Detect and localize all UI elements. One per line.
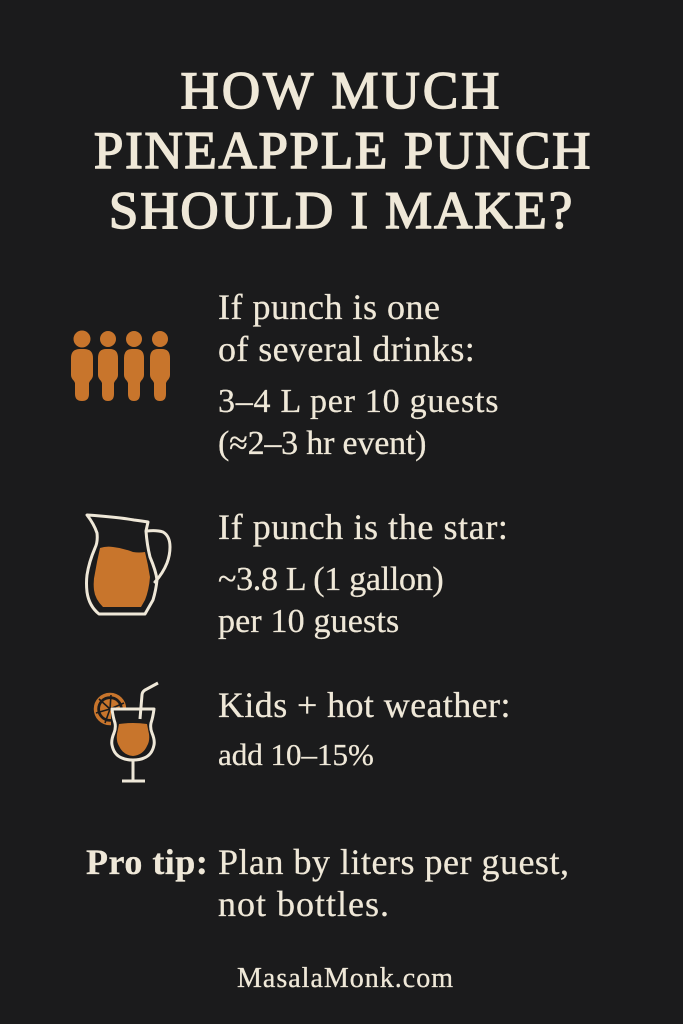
pro tip: Plan by liters per guest,	[218, 842, 569, 882]
title: PINEAPPLE PUNCH	[94, 122, 592, 180]
footer website: MasalaMonk.com	[237, 963, 454, 994]
icon: cocktail glass	[94, 682, 159, 782]
text: punch is the star: If punch is the star:	[218, 507, 509, 547]
text: punch is the star	[218, 507, 509, 640]
title: SHOULD I MAKE?	[109, 182, 574, 240]
text: kids and hot weather: Kids + hot weather:	[218, 685, 511, 725]
text: punch is the star: per 10 guests	[218, 603, 399, 640]
text: kids and hot weather	[218, 685, 511, 772]
text: punch is one of several drinks: (≈2–3 hr event)	[218, 425, 426, 462]
title: HOW MUCH	[181, 62, 502, 120]
text: punch is one of several drinks: 3–4 L per 10 guests	[218, 383, 499, 420]
text: punch is the star: ~3.8 L (1 gallon)	[218, 561, 443, 598]
text: punch is one of several drinks: If punch is one	[218, 287, 440, 327]
text: punch is one of several drinks: of several drinks:	[218, 329, 475, 369]
text: punch is one of several drinks	[218, 287, 499, 462]
pro tip	[86, 842, 569, 924]
pro tip: not bottles.	[218, 884, 390, 924]
icon: four guests	[71, 330, 170, 401]
icon: pitcher	[85, 514, 172, 616]
pro tip: Pro tip:	[86, 842, 208, 882]
title	[94, 62, 592, 240]
text: kids and hot weather: add 10–15%	[218, 737, 374, 772]
